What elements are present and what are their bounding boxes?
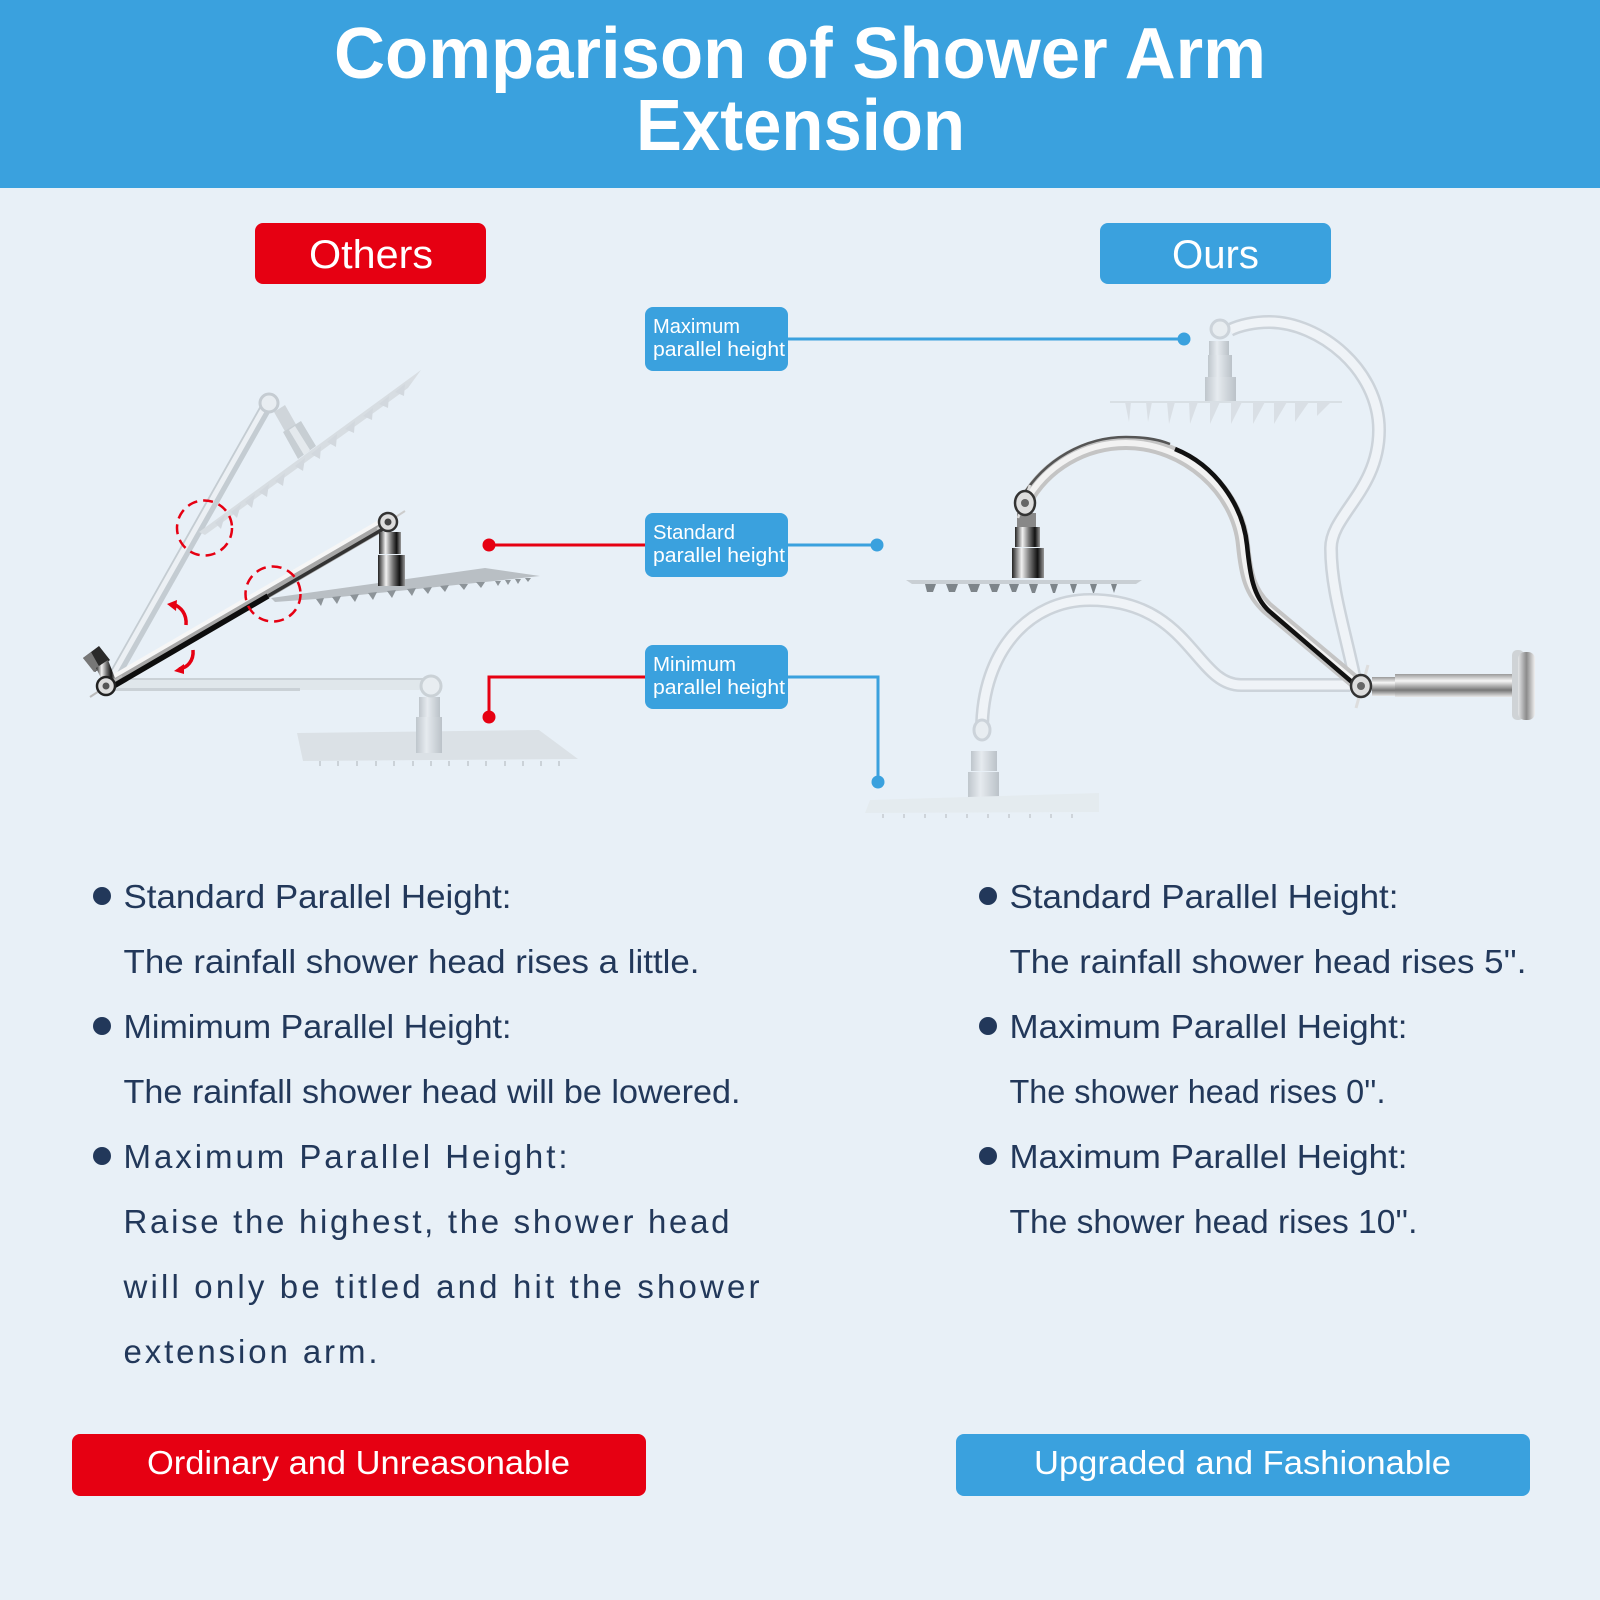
text block: others: Standard Parallel Height:	[124, 878, 512, 915]
label: maximum parallel height	[645, 307, 788, 371]
label: standard parallel height: Standard	[653, 522, 735, 544]
label: minimum parallel height	[645, 645, 788, 709]
badge: Ours: Ours	[1172, 233, 1259, 277]
label: maximum parallel height: parallel height	[653, 339, 785, 361]
head plate, standard position	[271, 568, 540, 602]
text block: ours: The rainfall shower head rises 5''.	[1010, 943, 1526, 980]
text block: ours: The shower head rises 10''.	[1010, 1203, 1418, 1240]
head plate, standard position	[906, 580, 1142, 584]
connector: ours maximum	[788, 338, 1184, 340]
title: Comparison of Shower Arm	[334, 14, 1266, 94]
badge: Others: Others	[309, 233, 433, 277]
connector lines and dots	[482, 332, 1190, 788]
connector: ours minimum	[788, 677, 878, 782]
text block: others: Raise the highest, the shower head	[124, 1203, 730, 1240]
dots	[482, 332, 1190, 788]
top hub	[377, 511, 405, 531]
base joint	[1351, 665, 1371, 708]
base joint	[90, 676, 122, 697]
text block: others: extension arm.	[124, 1333, 378, 1370]
text block: others: The rainfall shower head rises a little.	[124, 943, 700, 980]
footer button: ours verdict	[956, 1434, 1530, 1496]
illustration: ours shower arm positions	[865, 320, 1535, 818]
badge: Others	[255, 223, 486, 284]
label: standard parallel height	[645, 513, 788, 577]
neck and collar	[379, 532, 401, 554]
ghost raised arm	[110, 370, 421, 680]
illustration: others shower arm positions	[83, 370, 578, 766]
label: standard parallel height: parallel height	[653, 545, 785, 567]
label: maximum parallel height: Maximum	[653, 316, 740, 338]
title	[334, 14, 1266, 166]
ghost minimum arm	[865, 600, 1350, 818]
bullets	[979, 887, 997, 1165]
text block: others: The rainfall shower head will be lowered.	[124, 1073, 740, 1110]
header banner	[0, 0, 1600, 188]
main arm, standard position	[104, 518, 390, 687]
text block: others	[93, 878, 759, 1370]
main S-curved arm	[1022, 437, 1360, 689]
text block: others: will only be titled and hit the shower	[122, 1268, 759, 1305]
ghost maximum arm	[1110, 320, 1379, 684]
connector: ours standard	[788, 544, 877, 546]
footer button: others verdict	[72, 1434, 646, 1496]
text block: ours: The shower head rises 0''.	[1010, 1073, 1386, 1110]
connector: others standard	[489, 544, 645, 546]
footer button: ours verdict: Upgraded and Fashionable	[1034, 1444, 1451, 1481]
label: minimum parallel height: Minimum	[653, 654, 736, 676]
dashed highlight circles	[177, 500, 300, 622]
label: minimum parallel height: parallel height	[653, 677, 785, 699]
bullets	[93, 887, 111, 1165]
text block: ours: Maximum Parallel Height:	[1010, 1138, 1408, 1175]
text block: ours: Maximum Parallel Height:	[1010, 1008, 1408, 1045]
ghost lowered arm	[110, 676, 578, 766]
badge: Ours	[1100, 223, 1331, 284]
title: Extension	[636, 86, 965, 166]
text block: others: Mimimum Parallel Height:	[124, 1008, 512, 1045]
rotation arrows	[167, 600, 193, 674]
base nut	[83, 646, 115, 684]
text block: ours: Standard Parallel Height:	[1010, 878, 1398, 915]
text block: ours	[979, 878, 1526, 1240]
neck and collar	[1017, 513, 1036, 527]
text block: others: Maximum Parallel Height:	[124, 1138, 568, 1175]
footer button: others verdict: Ordinary and Unreasonable	[147, 1444, 570, 1481]
connector: others minimum	[489, 677, 645, 717]
wall mount pipe and flange	[1372, 650, 1535, 720]
head hub	[1015, 485, 1035, 518]
